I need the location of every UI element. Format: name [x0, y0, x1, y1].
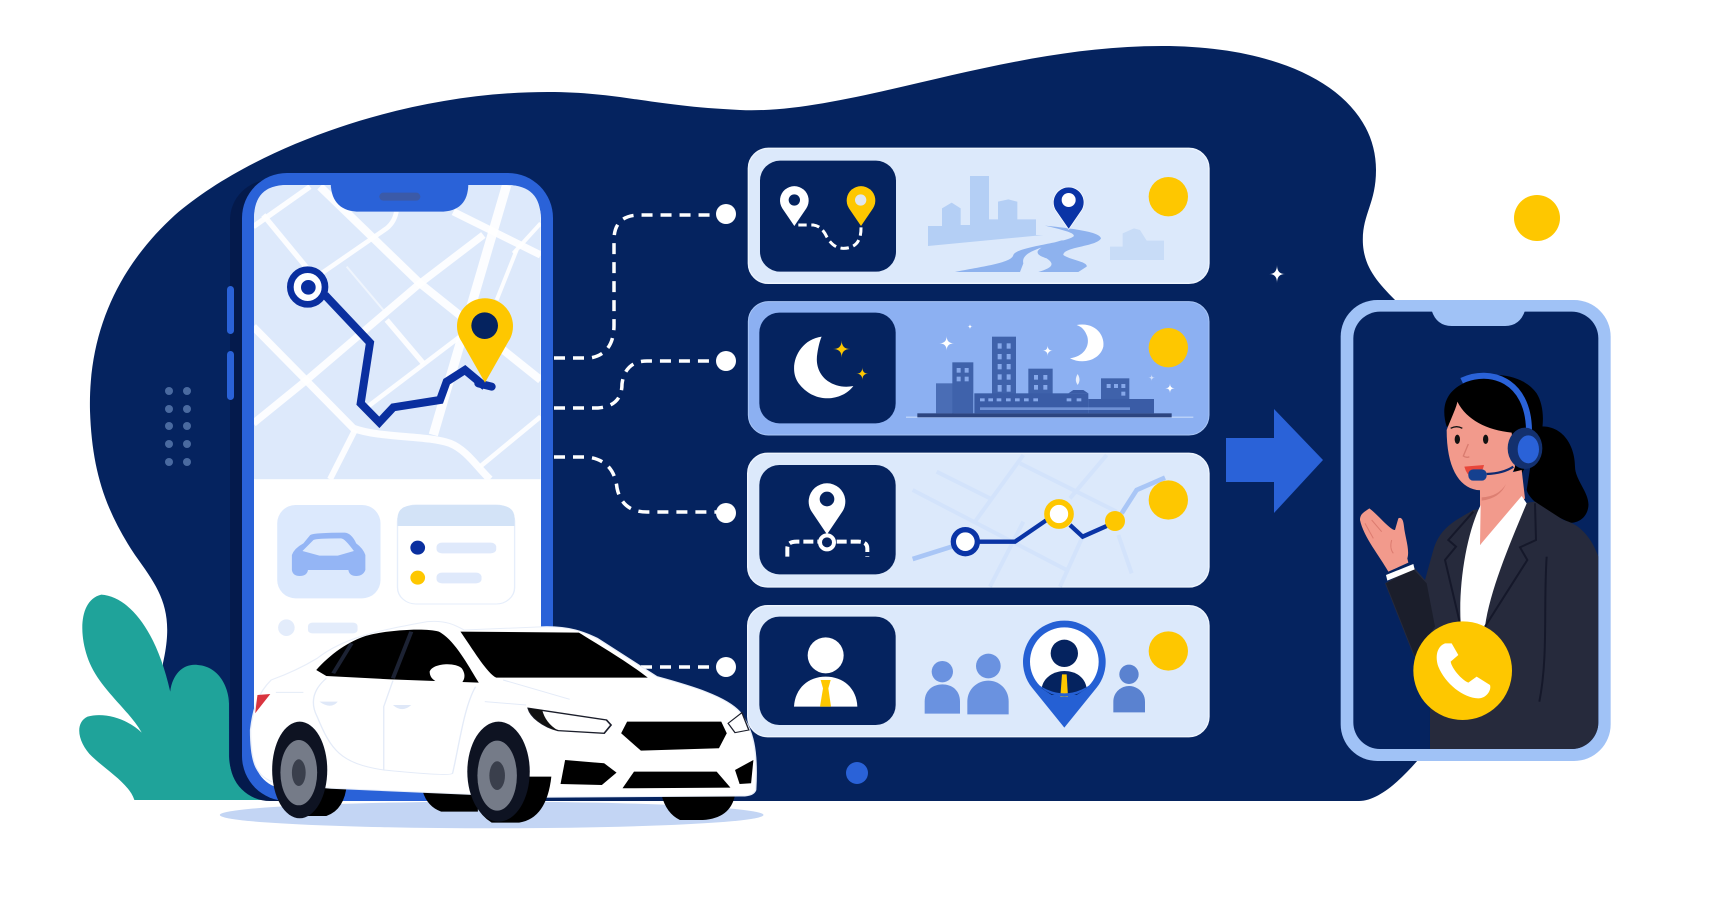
status row: [278, 619, 358, 636]
origin marker: [290, 270, 325, 304]
grille: [621, 722, 727, 751]
panel: route stops: [748, 453, 1209, 587]
decorative dot grid: [165, 387, 191, 466]
plant: [79, 595, 262, 800]
main phone: [227, 173, 553, 801]
right headlight: [728, 713, 749, 733]
agent phone frame: [1341, 300, 1611, 761]
front wheel: [467, 722, 551, 823]
mirror: [430, 664, 464, 683]
agent figure: [1360, 375, 1598, 749]
phone lower ui: [277, 505, 515, 636]
blue accent dot: [846, 762, 868, 784]
panel: night city: [748, 302, 1209, 435]
map: [253, 183, 541, 486]
panels 1 and 2: [748, 148, 1209, 435]
panels 3 and 4: [748, 453, 1209, 737]
panel: drivers: [748, 606, 1209, 737]
door lines: [276, 678, 570, 774]
phone screen: [254, 185, 541, 789]
tail light: [255, 694, 270, 713]
car tile: [277, 505, 381, 598]
phone shadow: [230, 180, 430, 801]
car: [220, 621, 763, 828]
lower intakes: [561, 760, 753, 788]
phone body: [242, 173, 553, 801]
car body: [251, 621, 756, 797]
sparkle: [1269, 265, 1285, 283]
destination pin: [457, 298, 513, 383]
illustration canvas: [79, 46, 1611, 828]
agent phone notch: [1432, 311, 1525, 326]
far wheels: [280, 783, 735, 820]
rear wheel: [272, 722, 327, 818]
side windows: [316, 630, 479, 683]
arrow: [1226, 409, 1323, 513]
windshield: [460, 632, 648, 678]
connector nodes: [716, 204, 736, 677]
route line: [325, 295, 485, 422]
notch: [331, 183, 468, 212]
background blob: [90, 46, 1450, 801]
panel: origin and destination: [748, 148, 1209, 283]
agent phone screen: [1353, 312, 1598, 749]
headlight: [528, 708, 611, 733]
route end cap: [478, 383, 492, 387]
yellow accent dot: [1514, 195, 1560, 241]
connectors: [554, 215, 722, 667]
ground shadow: [220, 802, 763, 828]
agent phone: [1341, 300, 1611, 761]
side buttons: [227, 286, 234, 400]
call badge: [1413, 621, 1512, 720]
info tile: [398, 505, 515, 604]
